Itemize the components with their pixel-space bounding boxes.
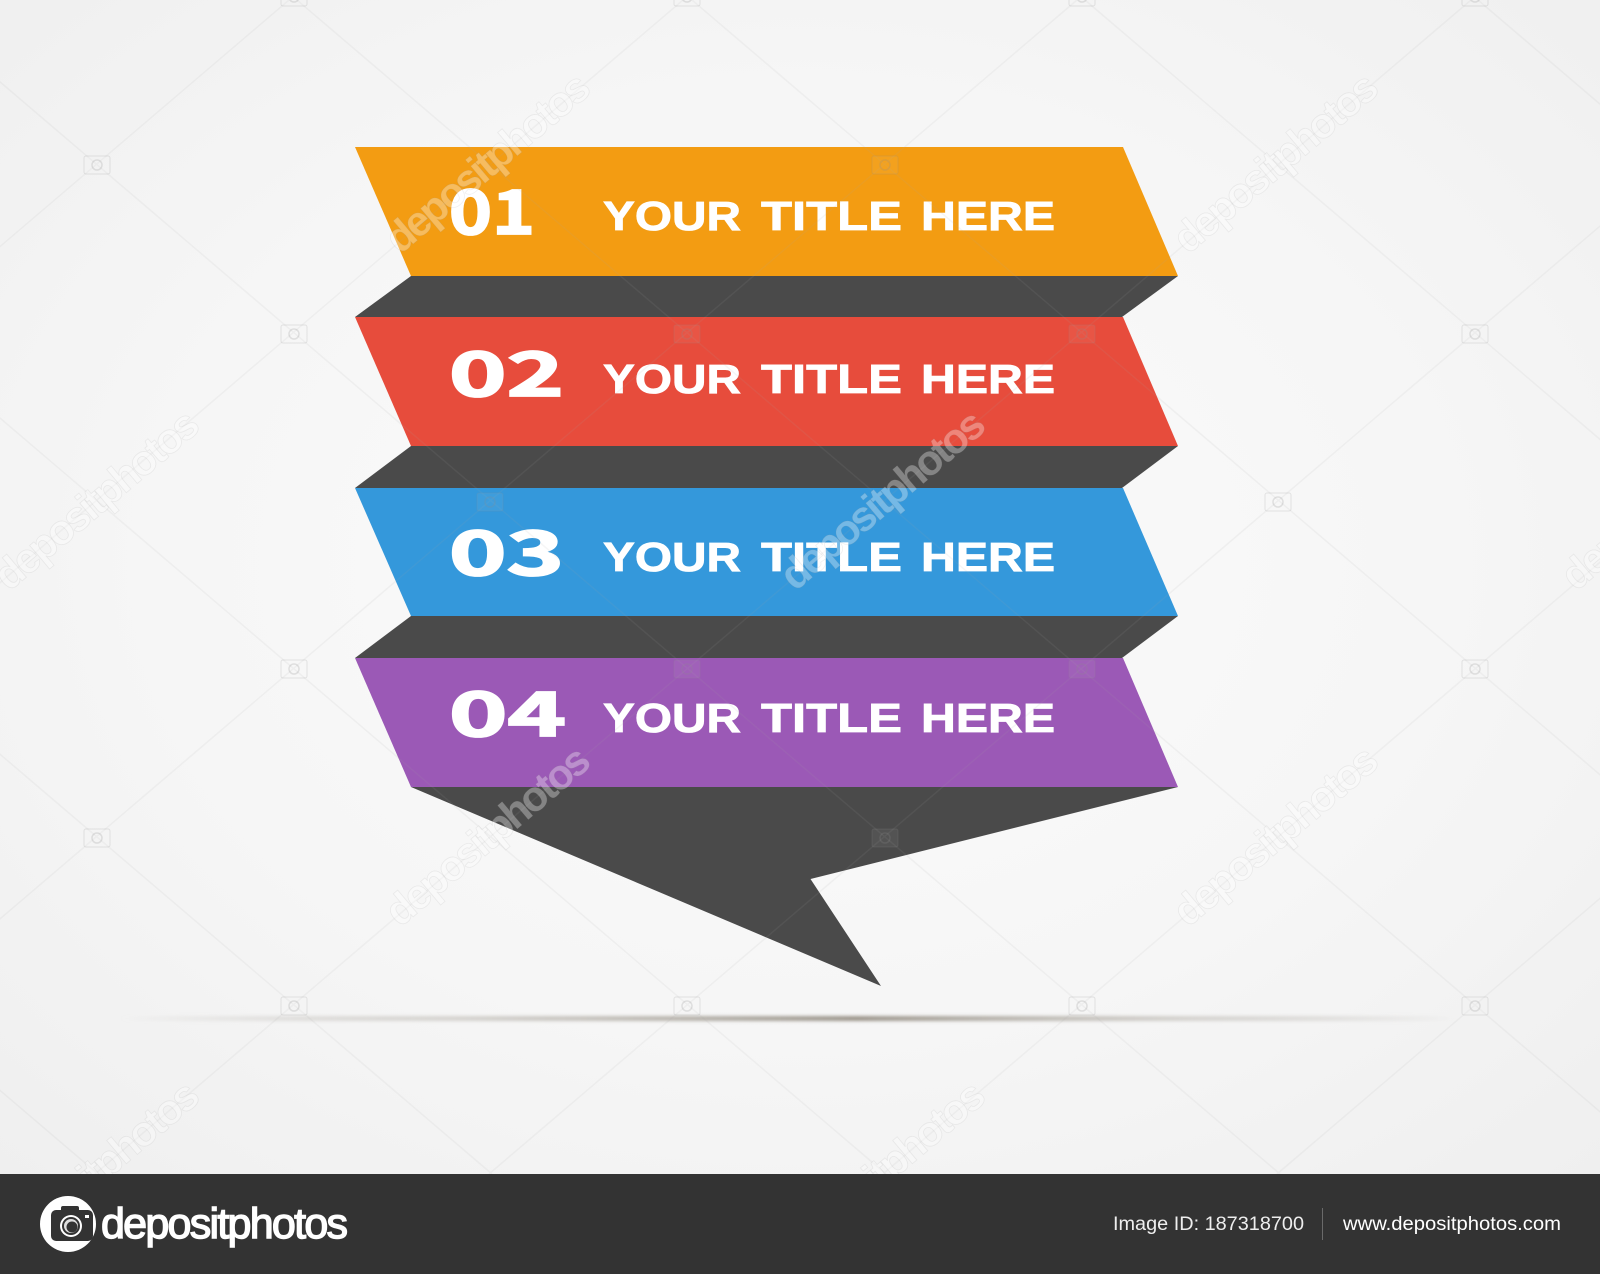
footer bar [0, 1174, 1600, 1274]
band 03: TITLE [761, 534, 902, 580]
band 04: TITLE [761, 695, 902, 741]
fold 1 [355, 276, 1178, 317]
watermarks: depositphotos [1163, 63, 1387, 262]
band 04: 04 [449, 665, 566, 754]
watermarks: depositphotos [1163, 736, 1387, 935]
band 02: YOUR [603, 356, 741, 402]
ground shadow [120, 1016, 1460, 1021]
icon: camera logo [40, 1196, 96, 1252]
band 01: 01 [449, 163, 535, 252]
band 01: HERE [921, 193, 1055, 239]
band 01: YOUR [603, 193, 741, 239]
camera watermark icons [84, 0, 1488, 1015]
band 04: HERE [921, 695, 1055, 741]
band 03 [355, 488, 1178, 616]
fold 3 [355, 616, 1178, 658]
speech bubble tail [411, 787, 1178, 986]
image id: Image ID: 187318700 [1113, 1213, 1304, 1235]
band 01: TITLE [761, 193, 902, 239]
divider [1322, 1208, 1323, 1240]
band 01 [355, 147, 1178, 276]
band 04: YOUR [603, 695, 741, 741]
band 04 [355, 658, 1178, 787]
watermarks: depositphotos [375, 63, 599, 262]
fold 2 [355, 446, 1178, 488]
watermarks: depositphotos [770, 400, 994, 599]
watermarks: depositphotos [375, 736, 599, 935]
band 03: HERE [921, 534, 1055, 580]
logo wordmark: depositphotos [101, 1200, 348, 1248]
band 02: HERE [921, 356, 1055, 402]
band 02: TITLE [761, 356, 902, 402]
band 02: 02 [449, 325, 564, 414]
band 03: YOUR [603, 534, 741, 580]
speech bubble ribbon [355, 147, 1178, 986]
watermarks: depositphotos [770, 1071, 994, 1270]
band 02 [355, 317, 1178, 446]
band 03: 03 [449, 504, 564, 593]
website url: www.depositphotos.com [1342, 1213, 1561, 1235]
